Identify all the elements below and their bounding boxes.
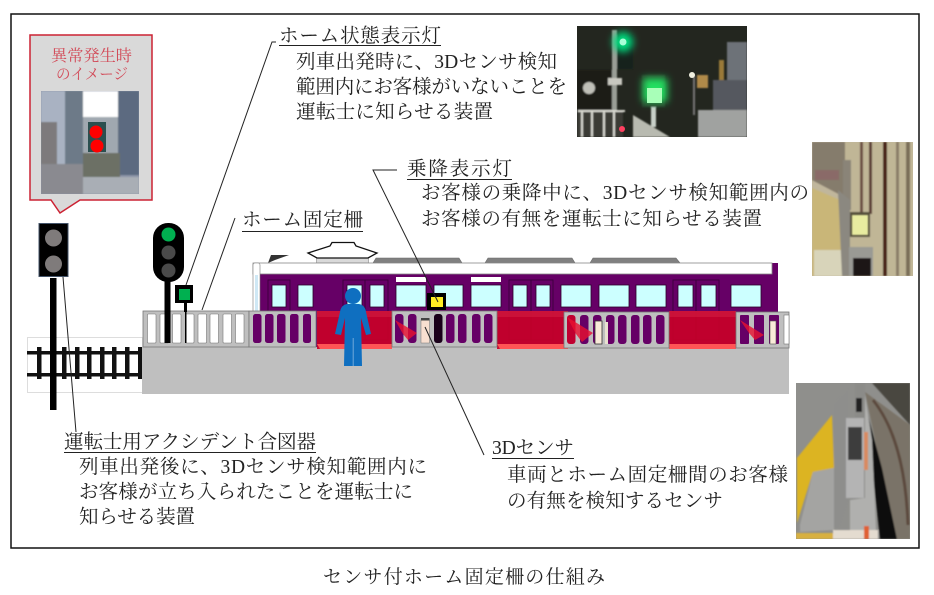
description: accident signal: お客様が立ち入られたことを運転士に: [79, 481, 413, 503]
platform: [142, 347, 789, 394]
callout heading: 異常発生時: [51, 47, 132, 65]
description: accident signal: [79, 455, 427, 528]
description: accident signal: 列車出発後に、3Dセンサ検知範囲内に: [79, 455, 427, 478]
label: boarding indicator light: [407, 158, 809, 230]
label: 3D sensor: 3Dセンサ: [492, 438, 574, 459]
description: boarding indicator light: [421, 182, 809, 230]
fence slots: white: [148, 314, 789, 344]
train: [253, 242, 778, 347]
person: [335, 288, 371, 366]
description: boarding indicator light: お客様の乗降中に、3Dセンサ検知範囲内の: [421, 182, 809, 204]
red detection zones: [317, 311, 736, 349]
3D sensors: [421, 318, 776, 344]
train windows: [272, 285, 761, 307]
description: platform status light: 列車出発時に、3Dセンサ検知: [296, 50, 557, 73]
photo: platform status light: [577, 26, 747, 137]
label: accident signal for drivers: [64, 431, 427, 528]
description: platform status light: 運転士に知らせる装置: [296, 101, 493, 123]
description: boarding indicator light: お客様の有無を運転士に知らせる装置: [421, 208, 762, 230]
label: boarding indicator light: 乗降表示灯: [407, 158, 512, 180]
label: platform status light: ホーム状態表示灯: [279, 25, 441, 47]
label: fixed platform fence: ホーム固定柵: [242, 209, 363, 231]
callout: image at time of anomaly: [30, 35, 152, 213]
callout heading: [51, 47, 132, 83]
boarding indicator light: [427, 293, 446, 310]
description: accident signal: 知らせる装置: [79, 506, 195, 528]
label: accident signal for drivers: 運転士用アクシデント合図器: [64, 431, 316, 453]
train body: [253, 263, 778, 347]
train doors: [268, 280, 719, 340]
platform status light: [175, 285, 193, 343]
leader lines: [63, 42, 484, 455]
description: 3D sensor: 車両とホーム固定柵間のお客様: [507, 463, 788, 486]
train roof equipment: [268, 242, 680, 263]
trackside accident signal: [39, 224, 68, 410]
track: [27, 338, 142, 392]
description: platform status light: [296, 50, 567, 123]
description: 3D sensor: [507, 463, 788, 512]
callout photo: [41, 91, 139, 194]
caption: センサ付ホーム固定柵の仕組み: [323, 566, 605, 588]
callout heading: のイメージ: [56, 66, 128, 83]
label: platform status light: [279, 25, 567, 123]
description: 3D sensor: の有無を検知するセンサ: [507, 490, 723, 512]
fence slots: purple: [253, 314, 779, 344]
photo: boarding indicator light: [812, 142, 913, 276]
departure signal: [153, 223, 184, 343]
platform fence: [143, 311, 789, 348]
description: platform status light: 範囲内にお客様がいないことを: [296, 76, 567, 98]
sensor beams: [395, 317, 764, 342]
label: 3D sensor: [492, 438, 788, 512]
photo: fence with 3D sensor: [796, 383, 910, 539]
